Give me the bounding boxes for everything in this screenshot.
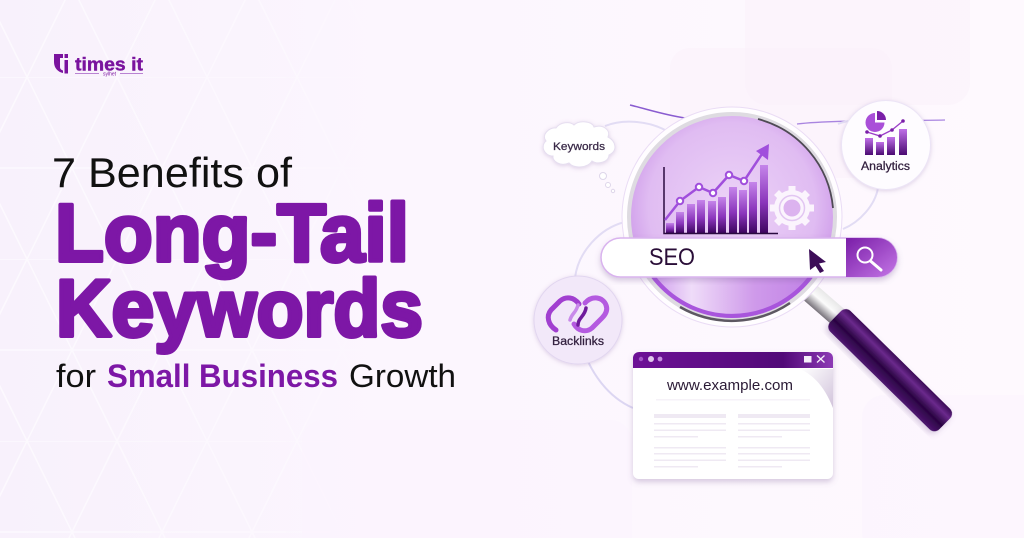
page fold <box>800 369 833 408</box>
keywords cloud <box>543 122 615 193</box>
heading line: for Small Business Growth: for <box>56 358 96 394</box>
icon: cursor <box>809 249 826 273</box>
title <box>52 149 456 394</box>
magnifying glass lens <box>620 107 844 327</box>
growth line with arrow <box>665 144 769 220</box>
logo wordmark: times it <box>75 54 143 74</box>
connector lines <box>575 105 945 408</box>
logo icon <box>54 54 68 74</box>
logo subtitle: sylhet <box>103 72 117 78</box>
bar chart <box>664 144 778 234</box>
thought bubble dots <box>600 172 615 193</box>
chart axes <box>664 167 778 234</box>
icon: search <box>858 248 881 270</box>
url text: www.example.com <box>666 378 793 394</box>
search bar <box>601 238 897 277</box>
lens lower crescent <box>652 278 813 318</box>
heading line: for Small Business Growth <box>56 358 456 394</box>
analytics label: Analytics <box>861 161 910 173</box>
heading line: for Small Business Growth: Small Business <box>107 358 338 394</box>
heading line: 7 Benefits of: 7 Benefits of <box>52 149 292 196</box>
keywords label: Keywords <box>553 141 606 153</box>
heading line: for Small Business Growth: Growth <box>349 358 456 394</box>
browser title bar <box>633 352 833 368</box>
icon: analytics chart <box>865 111 907 155</box>
lens rim shading <box>758 119 833 208</box>
search text: SEO <box>649 244 695 271</box>
page content lines <box>654 399 810 468</box>
heading line: Keywords: Keywords <box>56 264 423 354</box>
rim bottom shadow <box>680 303 790 321</box>
magnifying glass handle <box>799 281 955 434</box>
backlinks circle <box>534 276 622 364</box>
browser window <box>633 352 833 479</box>
backlinks label: Backlinks <box>552 336 604 348</box>
purple grip <box>825 306 955 434</box>
search button <box>846 238 897 277</box>
window dots <box>639 356 662 362</box>
icon: chain links <box>548 298 607 331</box>
window controls <box>804 356 824 362</box>
analytics circle <box>842 100 930 190</box>
logo: times it sylhet <box>54 54 143 78</box>
icon: gear <box>770 186 814 230</box>
metal neck <box>799 281 844 324</box>
heading line: Long-Tail: Long-Tail <box>55 188 409 279</box>
